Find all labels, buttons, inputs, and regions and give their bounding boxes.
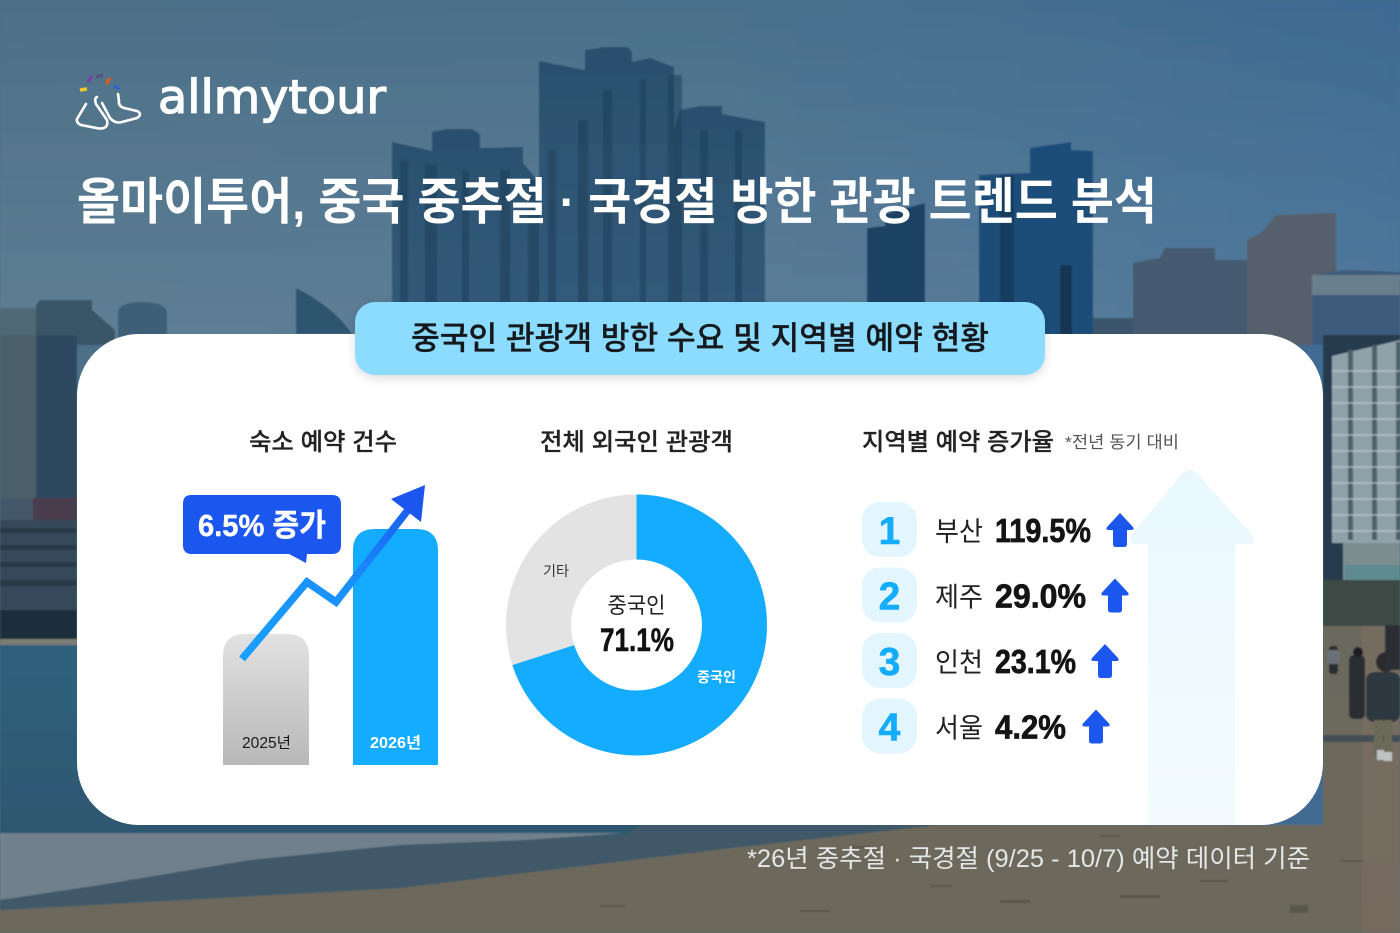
label: Chinese slice: 중국인 [697,669,736,685]
row 3 Incheon: 인천 [935,648,983,678]
row 1 Busan: 119.5% [995,512,1091,549]
beach pedestrians [1327,625,1400,761]
panel header pill [355,302,1045,375]
title: 올마이투어, 중국 중추절 · 국경절 방한 관광 트렌드 분석 [77,174,1157,230]
bar 2025 [223,634,309,765]
tower B [539,47,674,345]
row 2 Jeju [862,568,1129,622]
logo: allmytour [77,70,386,129]
tower D [867,203,925,345]
note: year on year: *전년 동기 대비 [1065,433,1179,452]
skyline towers [0,47,1400,345]
logo wordmark: allmytour [158,70,386,124]
trend arrow [242,485,425,659]
row 4 Seoul [862,698,1110,754]
heading: regional growth: 지역별 예약 증가율 [862,429,1054,456]
right white hotel [1332,340,1400,543]
row 4 Seoul: 서울 [935,714,983,744]
panel: foreign tourist donut chart [538,429,736,723]
right apartments [1133,248,1253,345]
callout: 6.5% increase: 6.5% 증가 [198,508,326,543]
panel: bookings bar chart [183,429,438,765]
label: others: 기타 [543,563,569,579]
panel header pill: 중국인 관광객 방한 수요 및 지역별 예약 현황 [411,320,989,356]
foam and wet sand [0,825,937,910]
tower A [392,129,539,345]
heading: foreign tourists: 전체 외국인 관광객 [540,429,733,456]
row 4 Seoul: 4.2% [995,708,1066,746]
donut center label [600,593,674,658]
row 2 Jeju: 29.0% [995,578,1086,614]
tower E [979,142,1093,345]
left low buildings and shore [0,335,36,500]
row 1 Busan [862,502,1134,557]
left buildings [0,308,36,345]
heading: bookings: 숙소 예약 건수 [249,429,397,456]
row 2 Jeju: 제주 [935,582,983,612]
decorative background arrow [1129,470,1254,825]
row 3 Incheon: 23.1% [995,643,1076,680]
glass sail [296,288,352,334]
row 1 Busan: 1 [879,510,900,553]
bar 2026 [353,529,438,765]
bar 2025: 2025년 [242,734,291,752]
donut [538,527,734,723]
panel: white card [77,334,1323,825]
row 1 Busan: 부산 [935,517,983,547]
bar 2026: 2026년 [370,734,421,752]
right upper background [1323,335,1400,635]
sand [0,626,1400,933]
tower C [674,106,765,345]
row 3 Incheon [862,633,1119,688]
sand speckles [600,835,1364,913]
logo icon [77,75,140,129]
callout: 6.5% increase [183,495,341,563]
row 3 Incheon: 3 [879,641,900,684]
donut center label: 71.1% [600,622,674,658]
footnote: *26년 중추절 · 국경절 (9/25 - 10/7) 예약 데이터 기준 [747,845,1310,873]
small roof building [1093,318,1134,345]
row 4 Seoul: 4 [879,706,901,750]
panel: regional growth ranking [862,429,1179,754]
sea [0,645,1000,845]
donut center label: 중국인 [608,593,666,618]
row 2 Jeju: 2 [879,576,900,618]
